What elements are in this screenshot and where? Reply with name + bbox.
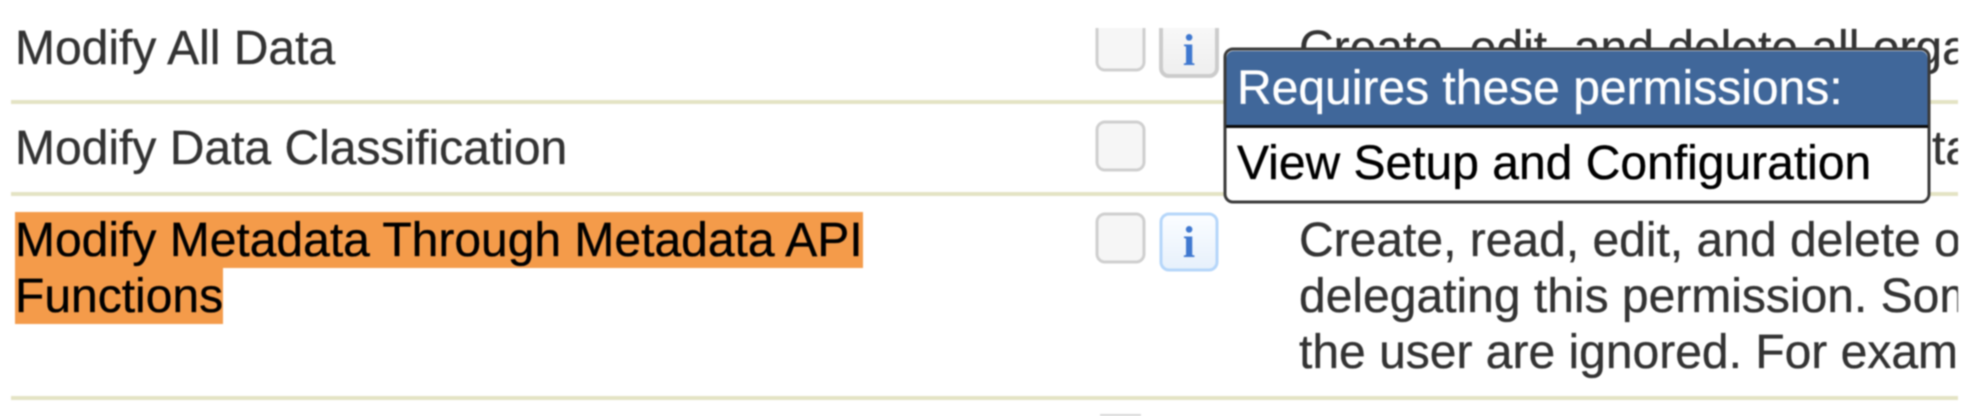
tooltip: Requires these permissions xyxy=(1225,49,1929,202)
checkbox: row 1 xyxy=(1095,28,1146,72)
checkbox: row 2 xyxy=(1097,122,1144,170)
highlighted label: Modify Metadata Through Metadata API Functions: Functions xyxy=(15,270,223,323)
highlighted label: Modify Metadata Through Metadata API Functions: Modify Metadata Through Metadata API xyxy=(15,214,863,267)
description: Modify Metadata Through Metadata API Functions: delegating this permission. Some xyxy=(1299,270,1986,323)
info button: row 1 xyxy=(1158,28,1220,78)
highlighted label: Modify Metadata Through Metadata API Functions xyxy=(15,212,863,324)
description: Modify Data Classification, visible fragment: ta xyxy=(1932,122,1972,175)
info button: row 3 (active) xyxy=(1161,214,1217,270)
info button: row 1: i xyxy=(1183,26,1195,75)
checkbox: row 3 xyxy=(1097,214,1144,262)
tooltip header xyxy=(1226,51,1928,125)
info button: row 3 (active): i xyxy=(1183,218,1195,267)
tooltip heading text: Requires these permissions: xyxy=(1237,62,1843,115)
checkbox: next row, top edge xyxy=(1100,414,1141,416)
row: Modify All Data label: Modify All Data xyxy=(15,22,335,75)
description: Modify Metadata Through Metadata API Functions xyxy=(1299,214,1986,379)
table row dividers xyxy=(11,100,1958,400)
tooltip body text: View Setup and Configuration xyxy=(1237,137,1871,190)
row: Modify Data Classification label: Modify Data Classification xyxy=(15,122,567,175)
